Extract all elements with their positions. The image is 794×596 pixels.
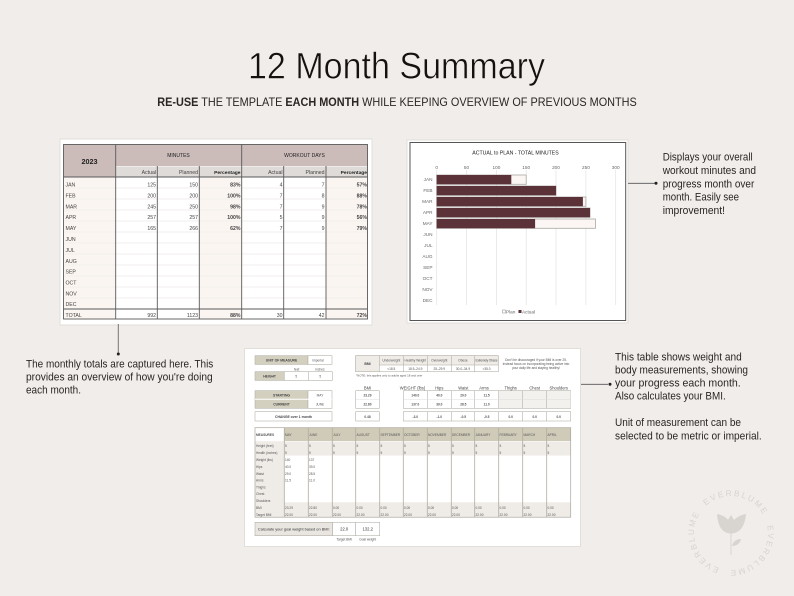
month headings <box>256 433 557 437</box>
month axis: AUG <box>422 254 433 259</box>
encouragement text: Instead focus on incorporating being active into <box>503 362 570 366</box>
measure values: 11.5 <box>285 478 291 482</box>
BMI reference table <box>356 356 498 372</box>
measure values: 5 <box>309 444 311 448</box>
axis labels: 150 <box>522 165 530 170</box>
table header: Percentage <box>341 170 367 176</box>
workout days values <box>277 182 367 319</box>
measure values: 22.00 <box>476 513 484 517</box>
title: 12 Month Summary <box>248 46 545 86</box>
measure values: 5 <box>500 444 502 448</box>
month axis <box>422 177 433 303</box>
column headings: BMI <box>364 386 371 390</box>
measure labels: Target BMI <box>256 513 272 517</box>
minutes values: 250 <box>189 204 198 210</box>
measure labels: Arms <box>256 478 264 482</box>
measure values: 5 <box>404 451 406 455</box>
measure labels: Waist <box>256 472 264 476</box>
BMI reference table: 30.0–34.9 <box>456 367 470 371</box>
goal weight calculator: Target BMI <box>336 538 352 542</box>
month labels: JUN <box>66 237 76 243</box>
measure values: 40.0 <box>285 465 291 469</box>
column headings: Chest <box>529 386 541 390</box>
measure labels: BMI <box>256 506 262 510</box>
callout: chart description: Displays your overall <box>663 152 753 164</box>
change over month row: -0.5 <box>484 415 490 419</box>
callout: chart description: workout minutes and <box>662 165 756 177</box>
minutes values: 245 <box>147 204 156 210</box>
column headings: Arms <box>479 386 489 390</box>
starting and current rows: 23.29 <box>364 394 372 398</box>
month axis: MAR <box>422 199 433 204</box>
minutes values: 257 <box>147 215 156 221</box>
measure values: 5 <box>476 451 478 455</box>
workout days values: 78% <box>357 204 367 210</box>
measure values: 22.00 <box>428 513 436 517</box>
workout days values: 7 <box>322 182 325 188</box>
month headings: MAY <box>285 433 293 437</box>
measure values: 22.00 <box>333 513 341 517</box>
goal weight calculator: Calculate your goal weight based on BMI: <box>258 526 330 532</box>
measure values: 5 <box>524 451 526 455</box>
arrow: measurements callout connector <box>581 383 612 386</box>
BMI note: *NOTE: this applies only to adults aged 18 and over <box>356 374 422 378</box>
minutes values: 98% <box>230 204 241 210</box>
measure values: 5 <box>356 444 358 448</box>
change over month row: 0.0 <box>556 415 561 419</box>
minutes values: 83% <box>230 182 241 188</box>
measure values: 5 <box>524 444 526 448</box>
measure labels <box>256 444 277 517</box>
chart legend <box>502 310 535 314</box>
workout days values: 42 <box>319 313 325 319</box>
measure values: 22.00 <box>524 513 532 517</box>
minutes values: 125 <box>147 182 156 188</box>
measure values: 22.00 <box>380 513 389 517</box>
measure labels: Shoulders <box>256 499 271 503</box>
change over month row: CHANGE over 1 month <box>275 415 312 419</box>
axis labels: 100 <box>492 165 501 170</box>
callout: measurements description: body measurements, showing <box>615 364 748 376</box>
callout: monthly totals description: The monthly totals are captured here. This <box>26 358 213 370</box>
minutes values <box>147 182 241 319</box>
axis labels: 300 <box>612 165 620 170</box>
workout days values: 9 <box>322 215 325 221</box>
minutes values: 88% <box>230 313 241 319</box>
callout: chart description: improvement! <box>663 205 725 217</box>
column headings: Waist <box>458 386 469 390</box>
starting and current rows: 40.0 <box>436 394 443 398</box>
chart legend: Actual <box>522 310 535 314</box>
table header: MINUTES <box>167 153 190 159</box>
starting and current rows: 29.0 <box>460 394 467 398</box>
starting and current rows <box>255 391 571 408</box>
change over month row: -1.0 <box>437 415 442 419</box>
minutes values: 992 <box>147 313 156 319</box>
logo: Everblume watermark: EVERBLUME <box>731 526 774 576</box>
unit of measure selector: 5 <box>295 374 297 378</box>
change over month row: -0.5 <box>461 415 466 419</box>
BMI reference table: Healthy Weight <box>405 358 426 362</box>
measure values: 0.00 <box>428 506 434 510</box>
minutes values: 200 <box>147 194 156 200</box>
chart legend: Plan <box>506 310 516 314</box>
column headings: Thighs <box>505 386 517 390</box>
month axis: FEB <box>423 188 432 193</box>
starting and current rows: 28.5 <box>460 402 467 406</box>
month axis: OCT <box>423 276 433 281</box>
table header: Actual <box>142 170 156 176</box>
change over month row: 0.0 <box>532 415 537 419</box>
month headings: JANUARY <box>476 433 491 437</box>
measure values: 0.00 <box>476 506 482 510</box>
measure values: 5 <box>428 451 430 455</box>
measure values: 0.00 <box>500 506 506 510</box>
starting and current rows: STARTING <box>273 394 290 398</box>
BMI reference table: 18.5–24.9 <box>408 367 423 371</box>
measure values: 22.00 <box>404 513 412 517</box>
measure values: 22.00 <box>356 513 365 517</box>
measure values: 5 <box>285 451 287 455</box>
goal weight calculator: 22.0 <box>340 526 349 532</box>
goal weight calculator: Goal weight <box>359 538 376 542</box>
workout days values: 7 <box>280 226 283 232</box>
callout: monthly totals description: each month. <box>26 384 81 396</box>
minutes values: 266 <box>189 226 198 232</box>
change over month row <box>255 412 571 421</box>
encouragement text: your daily life and staying healthy! <box>512 366 560 370</box>
goal weight calculator <box>255 522 380 542</box>
table header: Actual <box>268 170 282 176</box>
minutes values: 165 <box>147 226 156 232</box>
unit of measure selector: HEIGHT <box>263 374 277 378</box>
measure values: 0.00 <box>356 506 363 510</box>
measure values: 5 <box>309 451 311 455</box>
month axis: NOV <box>422 287 433 292</box>
axis labels: 200 <box>552 165 560 170</box>
callout: measurements description: your progress each month. <box>615 378 741 390</box>
measure values: 22.00 <box>309 513 317 517</box>
measure values: 22.80 <box>309 506 317 510</box>
measure values: 22.00 <box>285 513 293 517</box>
workout days values: 57% <box>357 182 367 188</box>
month axis: MAY <box>423 221 433 226</box>
month headings: AUGUST <box>356 433 370 437</box>
BMI reference table: Overweight <box>431 358 447 362</box>
measure labels: Weight (lbs) <box>256 458 273 462</box>
month headings: JULY <box>333 433 341 437</box>
unit of measure selector: UNIT OF MEASURE <box>266 358 298 362</box>
BMI reference table: BMI <box>364 362 371 366</box>
month labels: JAN <box>66 182 76 188</box>
axis labels: 50 <box>464 165 469 170</box>
BMI reference table: 25–29.9 <box>434 367 445 371</box>
table header: Planned <box>305 170 325 176</box>
month labels: FEB <box>66 194 76 200</box>
column headings: Hips <box>435 386 443 390</box>
workout days values: 56% <box>357 215 367 221</box>
logo: Everblume watermark <box>688 490 774 576</box>
panel: yearly minutes and workout days table <box>60 139 372 325</box>
month labels: SEP <box>66 270 76 276</box>
measure values: 23.29 <box>285 506 293 510</box>
minutes values: 62% <box>230 226 241 232</box>
panel: body measurements sheet <box>244 348 580 546</box>
column headings <box>364 386 568 390</box>
month headings: MARCH <box>524 433 536 437</box>
month axis: DEC <box>423 298 433 303</box>
month headings: JUNE <box>309 433 317 437</box>
callout: measurements description <box>615 352 762 442</box>
unit of measure selector <box>255 356 332 380</box>
callout: measurements description: Unit of measurement can be <box>615 417 741 429</box>
month labels: NOV <box>66 292 77 298</box>
measure values: 0.00 <box>404 506 410 510</box>
month axis: APR <box>423 210 433 215</box>
BMI reference table: <18.5 <box>387 367 396 371</box>
measure values: 5 <box>356 451 358 455</box>
measure labels: Chest <box>256 492 264 496</box>
month axis: SEP <box>423 265 432 270</box>
table header <box>64 144 368 177</box>
panel: actual to plan bar chart <box>407 140 628 323</box>
column headings: Shoulders <box>549 386 568 390</box>
arrow: chart callout connector <box>628 182 658 185</box>
measure values: 11.0 <box>309 478 315 482</box>
minutes values: 100% <box>227 215 241 221</box>
minutes values: 257 <box>189 215 198 221</box>
measure values: 5 <box>452 444 454 448</box>
encouragement text <box>503 358 570 370</box>
measure values: 0.00 <box>524 506 530 510</box>
workout days values: 7 <box>280 194 283 200</box>
callout: chart description: progress month over <box>663 178 755 190</box>
unit of measure selector: feet <box>294 368 299 372</box>
goal weight calculator: 132.2 <box>362 526 374 532</box>
measure values: 5 <box>285 444 287 448</box>
callout: chart description <box>662 152 756 217</box>
starting and current rows: 11.0 <box>484 402 490 406</box>
measure values: 5 <box>404 444 406 448</box>
table header: WORKOUT DAYS <box>284 153 325 159</box>
unit of measure selector: inches <box>315 368 325 372</box>
callout: chart description: month. Easily see <box>663 192 739 204</box>
change over month row: 0.0 <box>508 415 513 419</box>
workout days values: 9 <box>322 204 325 210</box>
workout days values: 4 <box>280 182 283 188</box>
month labels: MAR <box>66 204 77 210</box>
measure labels: Thighs <box>256 486 266 490</box>
measure values: 5 <box>548 451 550 455</box>
month axis: JAN <box>424 177 432 182</box>
month axis: JUL <box>424 243 433 248</box>
month headings: MEASURES <box>256 433 274 437</box>
workout days values: 5 <box>280 215 283 221</box>
change over month row: 0.48 <box>364 415 371 419</box>
workout days values: 7 <box>280 204 283 210</box>
arrow: totals callout connector <box>117 324 120 356</box>
callout: monthly totals description <box>26 358 213 396</box>
axis labels: 250 <box>582 165 590 170</box>
subtitle: RE-USE THE TEMPLATE EACH MONTH WHILE KEEPING OVERVIEW OF PREVIOUS MONTHS <box>157 96 637 109</box>
starting and current rows: 140.0 <box>411 394 420 398</box>
callout: measurements description: Also calculates your BMI. <box>615 390 726 402</box>
measure values: 5 <box>476 444 478 448</box>
starting and current rows: 137.0 <box>411 402 420 406</box>
month labels: APR <box>66 215 76 221</box>
measure values: 22.00 <box>452 513 460 517</box>
callout: measurements description: This table shows weight and <box>615 352 742 364</box>
measure values: 5 <box>333 451 335 455</box>
measure values: 5 <box>428 444 430 448</box>
actual bars <box>437 175 590 228</box>
measure values: 39.0 <box>309 465 315 469</box>
month headings: DECEMBER <box>452 433 471 437</box>
table header: 2023 <box>82 157 98 166</box>
callout: measurements description: selected to be metric or imperial. <box>615 430 762 442</box>
BMI reference table: Extremely Obese <box>476 358 498 362</box>
callout: monthly totals description: provides an overview of how you're doing <box>26 372 213 384</box>
BMI reference table: >35.0 <box>482 367 491 371</box>
workout days values: 72% <box>357 313 367 319</box>
logo: Everblume watermark: EVERBLUME <box>703 490 768 514</box>
month labels <box>66 182 82 319</box>
unit of measure selector: imperial <box>312 358 324 362</box>
measure values: 0.00 <box>548 506 554 510</box>
measure values: 22.00 <box>548 513 556 517</box>
chart title: ACTUAL to PLAN - TOTAL MINUTES <box>472 150 559 156</box>
measure labels: Hips <box>256 465 263 469</box>
measure labels: Height (feet) <box>256 444 274 448</box>
measure labels: Health (inches) <box>256 451 277 455</box>
measure values: 5 <box>380 444 382 448</box>
logo: Everblume watermark: EVERBLUME <box>688 512 718 573</box>
plan bars <box>437 175 595 228</box>
workout days values: 79% <box>357 226 367 232</box>
measure values: 137 <box>309 458 315 462</box>
measure values: 140 <box>285 458 291 462</box>
month axis: JUN <box>423 232 432 237</box>
measure values: 0.00 <box>380 506 387 510</box>
measure values: 5 <box>500 451 502 455</box>
measure values <box>285 444 556 517</box>
column headings: WEIGHT (lbs) <box>400 386 426 390</box>
minutes values: 1123 <box>187 313 198 319</box>
month headings: SEPTEMBER <box>380 433 401 437</box>
monthly measures table <box>255 428 571 517</box>
minutes values: 100% <box>227 194 241 200</box>
minutes values: 200 <box>189 194 198 200</box>
measure values: 22.00 <box>500 513 508 517</box>
starting and current rows: CURRENT <box>273 402 291 406</box>
month labels: TOTAL <box>66 313 82 319</box>
minutes values: 150 <box>189 182 198 188</box>
month labels: JUL <box>66 248 75 254</box>
workout days values: 30 <box>277 313 283 319</box>
workout days values: 9 <box>322 226 325 232</box>
BMI reference table: Underweight <box>382 358 400 362</box>
axis labels: 0 <box>435 165 438 170</box>
measure values: 5 <box>452 451 454 455</box>
starting and current rows: 22.80 <box>364 402 372 406</box>
unit of measure selector: 5 <box>319 374 321 378</box>
month labels: AUG <box>66 259 77 265</box>
measure values: 5 <box>380 451 382 455</box>
axis labels <box>435 165 620 170</box>
measure values: 0.00 <box>333 506 339 510</box>
month labels: MAY <box>66 226 77 232</box>
measure values: 29.0 <box>285 472 291 476</box>
encouragement text: Don't be discouraged if your BMI is over 25. <box>505 358 567 362</box>
workout days values: 88% <box>357 194 367 200</box>
starting and current rows: JUNE <box>316 402 324 406</box>
starting and current rows: MAY <box>317 394 324 398</box>
measure values: 28.5 <box>309 472 315 476</box>
starting and current rows: 39.0 <box>436 402 443 406</box>
measure values: 5 <box>548 444 550 448</box>
month headings: APRIL <box>548 433 557 437</box>
measure values: 0.00 <box>452 506 458 510</box>
month labels: DEC <box>66 302 77 308</box>
month headings: FEBRUARY <box>500 433 518 437</box>
starting and current rows: 11.5 <box>484 394 490 398</box>
table header: Percentage <box>214 170 241 176</box>
measure values: 5 <box>333 444 335 448</box>
table header: Planned <box>179 170 198 176</box>
BMI reference table: Obese <box>458 358 468 362</box>
change over month row: -3.0 <box>413 415 418 419</box>
month headings: OCTOBER <box>404 433 420 437</box>
workout days values: 8 <box>322 194 325 200</box>
month labels: OCT <box>66 280 77 286</box>
month headings: NOVEMBER <box>428 433 447 437</box>
